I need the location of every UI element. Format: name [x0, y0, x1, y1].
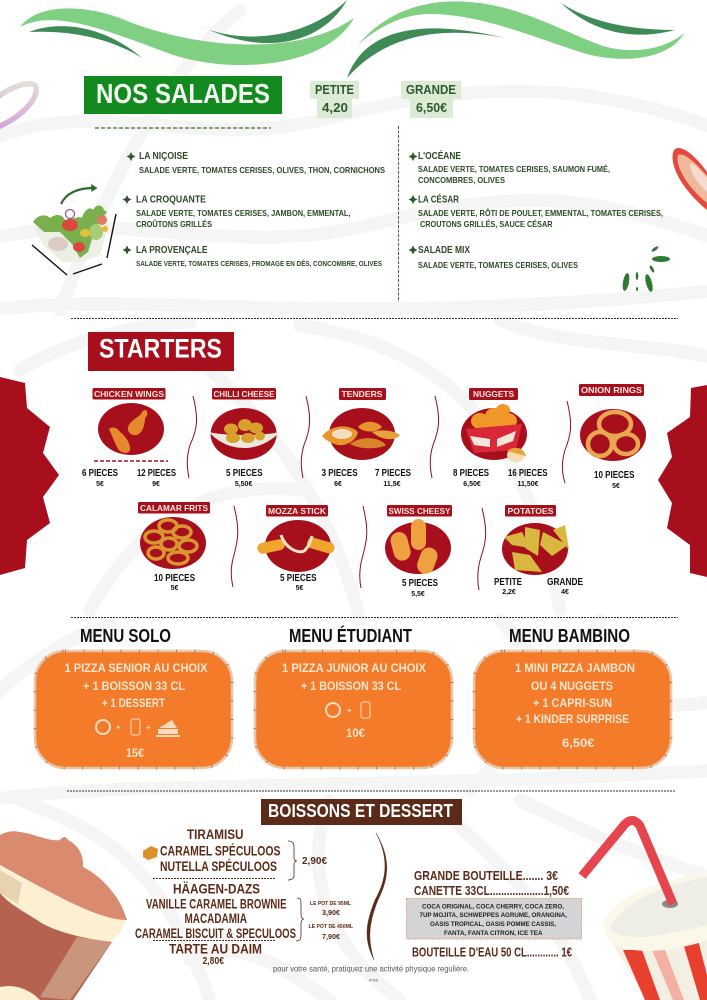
- starter: swiss cheesy: 5 PIECES: [402, 578, 438, 589]
- menu bambino: + 1 KINDER SURPRISE: [516, 712, 629, 726]
- starter: chilli cheese: 5,50€: [235, 481, 252, 488]
- starter: swiss cheesy: SWISS CHEESY: [388, 506, 451, 516]
- starter: chicken wings: 5€: [96, 481, 104, 488]
- dessert prices with braces: LE POT DE 450ML: [308, 924, 353, 930]
- salad list: left column: SALADE VERTE, TOMATES CERISES, OLIVES, THON, CORNICHONS: [139, 165, 385, 175]
- menu etudiant: MENU ÉTUDIANT: [289, 625, 412, 646]
- heading: boissons et dessert: BOISSONS ET DESSERT: [268, 801, 453, 821]
- red side shape: right: [658, 385, 707, 577]
- dessert prices with braces: 2,90€: [302, 856, 327, 867]
- salad list: right column: [408, 149, 663, 270]
- heading: boissons et dessert: [261, 799, 462, 825]
- salad list: left column: LA CROQUANTE: [136, 194, 206, 206]
- dessert list: TARTE AU DAIM: [169, 942, 262, 956]
- illustration: ice cream pot: [0, 831, 127, 1000]
- dessert list: CARAMEL BISCUIT & SPECULOOS: [135, 926, 296, 941]
- menu solo: + 1 DESSERT: [102, 696, 166, 710]
- salad list: left column: [122, 150, 385, 268]
- starter: nuggets: NUGGETS: [473, 389, 514, 399]
- footer note: [273, 964, 469, 982]
- price: petite: [310, 81, 359, 118]
- starter: swiss cheesy: 5,5€: [411, 591, 425, 598]
- starter: nuggets: 11,50€: [517, 481, 539, 488]
- starter: mozza stick: 5€: [296, 585, 303, 592]
- menu bambino: MENU BAMBINO: [509, 626, 630, 646]
- starter: calamar frits: 10 PIECES: [154, 573, 195, 584]
- starter: swiss cheesy: [385, 505, 452, 598]
- salad list: right column: SALADE VERTE, TOMATES CERISES, SAUMON FUMÉ,: [418, 164, 610, 174]
- dessert list: MACADAMIA: [184, 911, 247, 926]
- icon: onion ring: [0, 84, 36, 127]
- menu solo: 1 PIZZA SENIOR AU CHOIX: [64, 661, 208, 675]
- starter: potatoes: POTATOES: [508, 506, 554, 516]
- salad list: left column: SALADE VERTE, TOMATES CERISES, FROMAGE EN DÉS, CONCOMBRE, OLIVES: [136, 259, 382, 268]
- dessert prices with braces: 3,90€: [322, 908, 341, 917]
- starter: chicken wings: 12 PIECES: [137, 468, 176, 479]
- icon: green splash: [621, 245, 670, 292]
- starter: chilli cheese: CHILLI CHEESE: [214, 389, 275, 399]
- starter: nuggets: 6,50€: [463, 481, 481, 488]
- starter: mozza stick: 5 PIECES: [280, 573, 317, 584]
- heading: starters: [88, 332, 234, 371]
- starter: chicken wings: CHICKEN WINGS: [94, 389, 164, 399]
- salad list: left column: LA NIÇOISE: [139, 150, 188, 162]
- menu solo: +: [146, 723, 151, 732]
- top wave decoration: [20, 0, 684, 78]
- starter: potatoes: 2,2€: [502, 589, 516, 596]
- menu etudiant: 10€: [346, 726, 365, 740]
- salad list: right column: CONCOMBRES, OLIVES: [418, 175, 505, 185]
- menu bambino: + 1 CAPRI-SUN: [533, 696, 612, 710]
- starter: onion rings: [579, 384, 646, 490]
- dessert list: 2,80€: [202, 956, 224, 967]
- drinks list: BOUTEILLE D'EAU 50 CL............ 1€: [412, 944, 572, 960]
- starter: mozza stick: MOZZA STICK: [268, 506, 327, 516]
- dessert prices with braces: [288, 841, 353, 941]
- salad list: right column: SALADE VERTE, RÔTI DE POULET, EMMENTAL, TOMATES CERISES,: [418, 207, 663, 218]
- drinks list: GRANDE BOUTEILLE....... 3€: [414, 868, 558, 883]
- starter: calamar frits: 5€: [171, 585, 178, 592]
- starter: tenders: 7 PIECES: [375, 468, 411, 479]
- dessert prices with braces: LE POT DE 95ML: [310, 901, 351, 907]
- starter: nuggets: 8 PIECES: [453, 468, 489, 479]
- dessert list: CARAMEL SPÉCULOOS: [160, 844, 280, 858]
- starter: tenders: 3 PIECES: [322, 468, 358, 479]
- salad list: right column: LA CÉSAR: [418, 192, 459, 206]
- starter: mozza stick: [256, 505, 336, 592]
- starter: calamar frits: CALAMAR FRITS: [140, 503, 208, 513]
- price: grande: [401, 81, 461, 118]
- menu solo: [35, 626, 232, 768]
- menu bambino: OU 4 NUGGETS: [531, 679, 613, 693]
- icon: tomato slice: [672, 148, 707, 210]
- dessert list: VANILLE CARAMEL BROWNIE: [146, 896, 286, 912]
- menu bambino: [474, 626, 671, 768]
- dessert prices with braces: 7,90€: [322, 932, 341, 941]
- menu etudiant: [255, 625, 452, 768]
- menu solo: +: [116, 723, 121, 732]
- starter: tenders: 6€: [334, 481, 342, 488]
- red side shape: left: [0, 377, 59, 575]
- menu solo: MENU SOLO: [80, 626, 171, 646]
- footer note: IPNS: [369, 978, 379, 982]
- price: petite: PETITE: [315, 83, 354, 97]
- price: grande: GRANDE: [406, 83, 456, 97]
- salad list: right column: SALADE VERTE, TOMATES CERISES, OLIVES: [418, 260, 578, 270]
- footer note: pour votre santé, pratiquez une activité physique regulière.: [273, 964, 469, 974]
- drinks list: 7UP MOJITA, SCHWEPPES AGRUME, ORANGINA,: [420, 912, 567, 919]
- starter: tenders: TENDERS: [342, 389, 383, 399]
- starter: chilli cheese: [209, 388, 280, 488]
- menu solo: + 1 BOISSON 33 CL: [83, 679, 185, 693]
- dessert list: [135, 827, 296, 967]
- starter: chicken wings: [82, 388, 176, 488]
- salad list: right column: SALADE MIX: [418, 244, 470, 256]
- price: grande: 6,50€: [416, 101, 447, 115]
- menu etudiant: 1 PIZZA JUNIOR AU CHOIX: [282, 661, 426, 675]
- menu bambino: 6,50€: [562, 736, 595, 750]
- menu bambino: 1 MINI PIZZA JAMBON: [515, 661, 635, 675]
- starter: tenders: 11,5€: [383, 481, 401, 488]
- starter: nuggets: 16 PIECES: [508, 468, 548, 479]
- dessert list: HÄAGEN-DAZS: [173, 882, 260, 896]
- menu etudiant: + 1 BOISSON 33 CL: [301, 679, 401, 693]
- dessert list: TIRAMISU: [187, 827, 244, 842]
- salad list: left column: SALADE VERTE, TOMATES CERISES, JAMBON, EMMENTAL,: [136, 208, 350, 218]
- starter: nuggets: [453, 388, 548, 488]
- salad list: right column: L'OCÉANE: [418, 149, 461, 162]
- price: petite: 4,20: [322, 101, 348, 115]
- drinks list: COCA ORIGINAL, COCA CHERRY, COCA ZERO,: [422, 904, 564, 910]
- menu solo: 15€: [126, 746, 144, 760]
- salad list: left column: CROÛTONS GRILLÉS: [136, 218, 212, 229]
- starter: tenders: [322, 388, 411, 488]
- menu etudiant: +: [347, 706, 352, 715]
- starter: chicken wings: 9€: [152, 481, 160, 488]
- drinks list: FANTA, FANTA CITRON, ICE TEA: [444, 930, 543, 937]
- starter: potatoes: GRANDE: [547, 577, 583, 588]
- starter: potatoes: [494, 505, 583, 596]
- starter: onion rings: 5€: [612, 483, 620, 490]
- salad list: left column: LA PROVENÇALE: [136, 244, 208, 256]
- icon: drink cup: [582, 820, 707, 1000]
- drinks list: CANETTE 33CL...................1,50€: [414, 883, 569, 898]
- starter: onion rings: ONION RINGS: [581, 385, 642, 395]
- drinks list: OASIS TROPICAL, OASIS POMME CASSIS,: [430, 921, 556, 928]
- starter: potatoes: PETITE: [494, 577, 522, 588]
- dessert list: NUTELLA SPÉCULOOS: [160, 859, 277, 874]
- starter: potatoes: 4€: [561, 589, 569, 596]
- drinks list: [406, 868, 582, 960]
- heading: nos salades: NOS SALADES: [96, 78, 270, 109]
- starter: onion rings: 10 PIECES: [594, 470, 635, 481]
- salad list: right column: CROUTONS GRILLÉS, SAUCE CÉSAR: [420, 219, 552, 229]
- icon: salad bowl: [32, 184, 116, 275]
- heading: starters: STARTERS: [99, 334, 222, 364]
- starter: chicken wings: 6 PIECES: [82, 468, 118, 479]
- starter: calamar frits: [138, 502, 210, 592]
- starter: chilli cheese: 5 PIECES: [226, 468, 263, 479]
